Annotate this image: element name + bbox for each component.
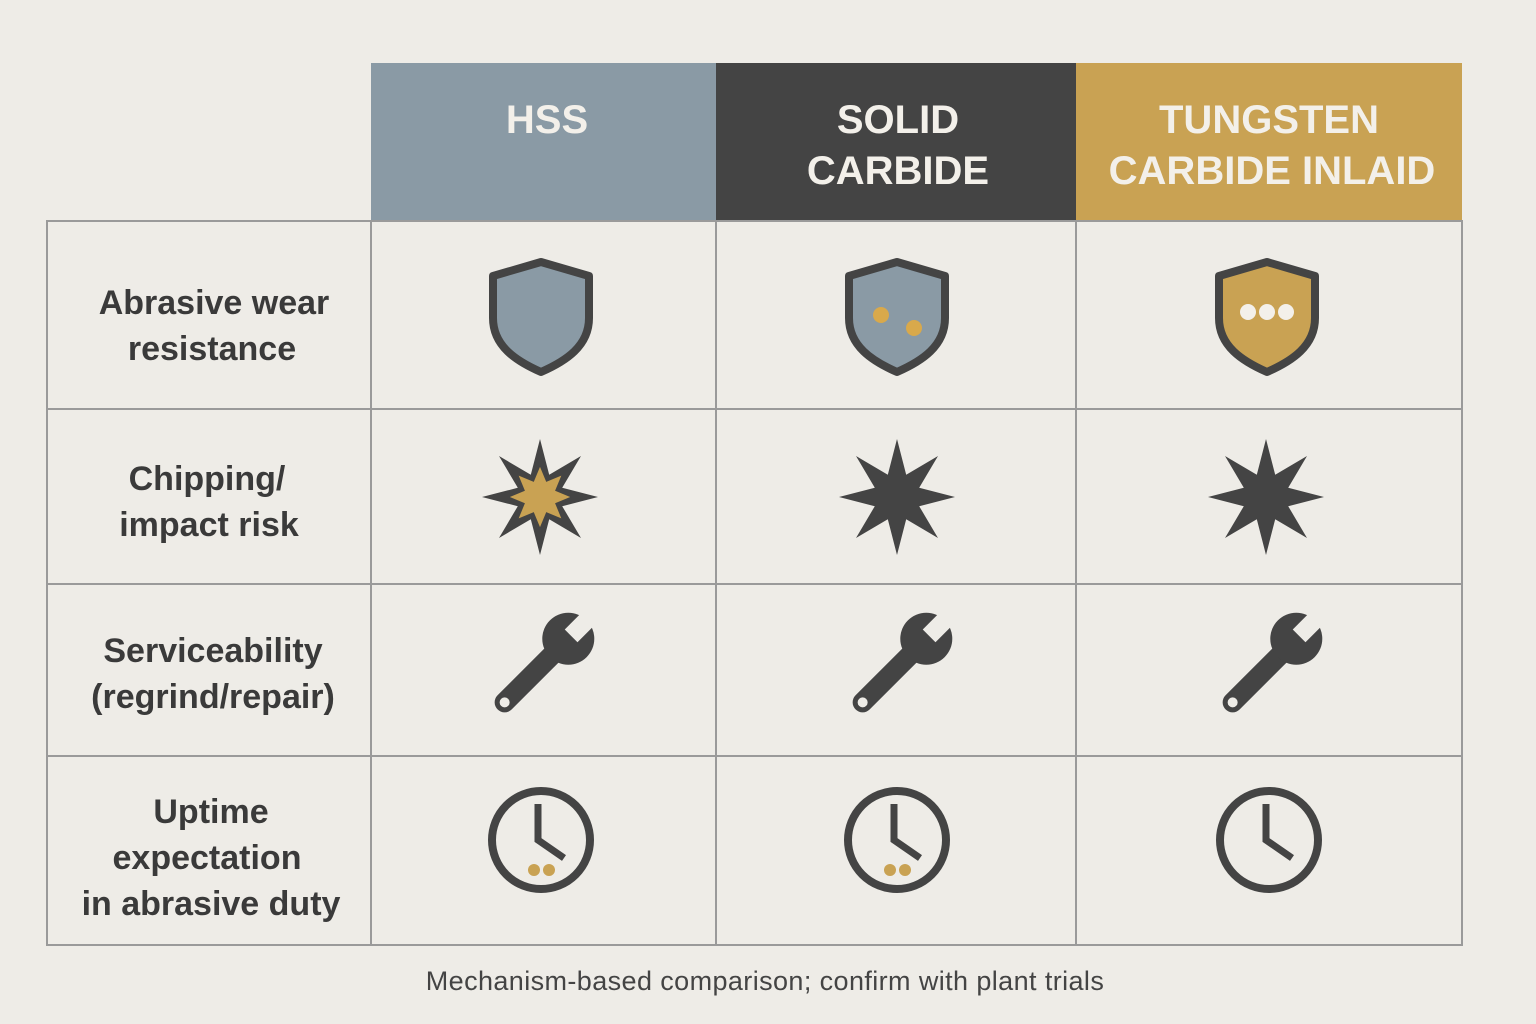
row labels: resistance [128, 330, 296, 368]
header: Solid Carbide [716, 63, 1076, 221]
row labels: Abrasive wear [99, 284, 329, 322]
header: Tungsten Carbide Inlaid [1076, 63, 1462, 221]
icon: clock solid carbide [848, 791, 946, 889]
caption: Mechanism-based comparison; confirm with plant trials [426, 966, 1104, 996]
header: Tungsten Carbide Inlaid: CARBIDE INLAID [1109, 149, 1435, 193]
icon: star inlaid [1208, 439, 1324, 555]
header: Solid Carbide: SOLID [837, 98, 959, 142]
icon: clock HSS [492, 791, 590, 889]
row labels [82, 284, 341, 923]
header: Tungsten Carbide Inlaid: TUNGSTEN [1159, 98, 1379, 142]
icon: clock inlaid [1220, 791, 1318, 889]
icon: star solid carbide [839, 439, 955, 555]
header: HSS [371, 63, 716, 221]
icon: star HSS [482, 439, 598, 555]
icon: wrench solid carbide [841, 596, 969, 724]
row labels: impact risk [119, 506, 299, 544]
icon: wrench inlaid [1211, 596, 1339, 724]
row labels: in abrasive duty [82, 885, 341, 923]
icon: wrench HSS [483, 596, 611, 724]
header: HSS: HSS [506, 98, 588, 142]
table grid [47, 221, 1462, 945]
row labels: expectation [113, 839, 301, 877]
icon: shield inlaid [1219, 262, 1315, 372]
icon: shield solid carbide [849, 262, 945, 372]
row labels: Uptime [153, 793, 269, 831]
icon: shield HSS [493, 262, 589, 372]
header: Solid Carbide: CARBIDE [807, 149, 989, 193]
row labels: (regrind/repair) [91, 678, 335, 716]
row labels: Serviceability [103, 632, 323, 670]
row labels: Chipping/ [129, 460, 286, 498]
